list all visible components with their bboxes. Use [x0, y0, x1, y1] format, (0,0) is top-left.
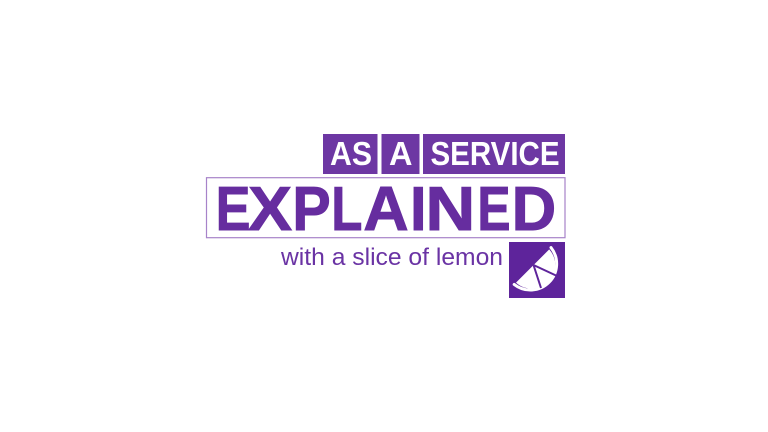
icon: lemon slice: [509, 242, 565, 298]
tag: A: [382, 134, 420, 174]
tagline: with a slice of lemon: [280, 244, 503, 271]
heading frame: EXPLAINED: E: [477, 174, 511, 244]
heading frame: EXPLAINED: [206, 174, 565, 244]
heading frame: EXPLAINED: L: [331, 174, 362, 244]
tag: A: A: [389, 135, 412, 172]
heading frame: EXPLAINED: A: [363, 174, 409, 244]
tag: AS: AS: [330, 135, 372, 172]
tag: SERVICE: SERVICE: [430, 135, 560, 172]
heading frame: EXPLAINED: N: [425, 174, 475, 244]
heading frame: EXPLAINED: I: [410, 174, 427, 244]
heading frame: EXPLAINED: P: [292, 174, 331, 244]
heading frame: EXPLAINED: D: [512, 174, 556, 244]
heading frame: EXPLAINED: E: [216, 174, 250, 244]
heading frame: EXPLAINED: X: [248, 174, 292, 244]
